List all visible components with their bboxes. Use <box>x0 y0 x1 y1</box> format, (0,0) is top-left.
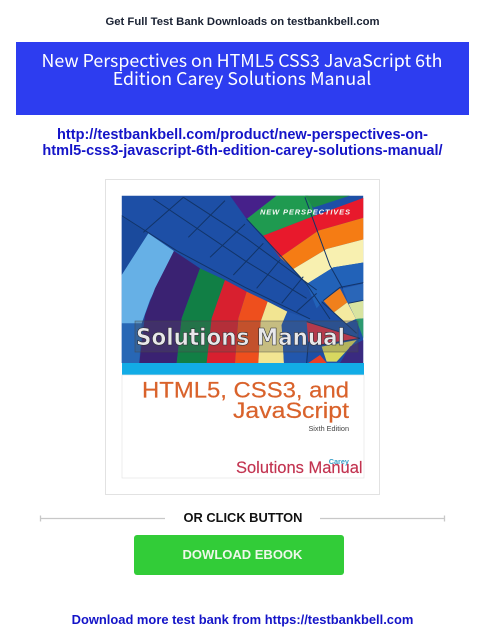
title banner <box>16 42 469 115</box>
cyan strip <box>122 363 364 375</box>
panel seams <box>122 197 365 363</box>
cover title: JavaScript <box>233 398 349 423</box>
white cover lower panel <box>122 375 364 478</box>
cover title: HTML5, CSS3, and <box>142 378 349 402</box>
top heading: Get Full Test Bank Downloads on testbankbell.com <box>105 16 380 28</box>
balloon artwork <box>122 196 365 363</box>
footer link: Download more test bank from https://testbankbell.com <box>72 612 413 627</box>
title banner: New Perspectives on HTML5 CSS3 JavaScript 6th <box>42 47 442 73</box>
left divider <box>40 516 165 522</box>
cover caption: Solutions Manual: Solutions Manual <box>136 323 345 351</box>
product link: http://testbankbell.com/product/new-perspectives-on- <box>57 127 428 143</box>
book cover <box>40 179 446 522</box>
caption box overlay <box>135 321 358 352</box>
download button <box>134 535 344 575</box>
author: Carey <box>329 457 350 466</box>
cover series label: NEW PERSPECTIVES <box>260 208 350 216</box>
product link: html5-css3-javascript-6th-edition-carey-solutions-manual/ <box>42 143 443 159</box>
product link <box>42 127 443 159</box>
cover solutions manual: Solutions Manual <box>236 459 363 477</box>
or click button label: OR CLICK BUTTON <box>184 510 302 525</box>
edition: Sixth Edition <box>308 424 349 433</box>
download button: DOWLOAD EBOOK <box>183 547 302 562</box>
right divider <box>320 516 444 522</box>
cover title <box>142 378 349 423</box>
cover frame <box>106 180 380 494</box>
title banner: Edition Carey Solutions Manual <box>113 64 371 90</box>
